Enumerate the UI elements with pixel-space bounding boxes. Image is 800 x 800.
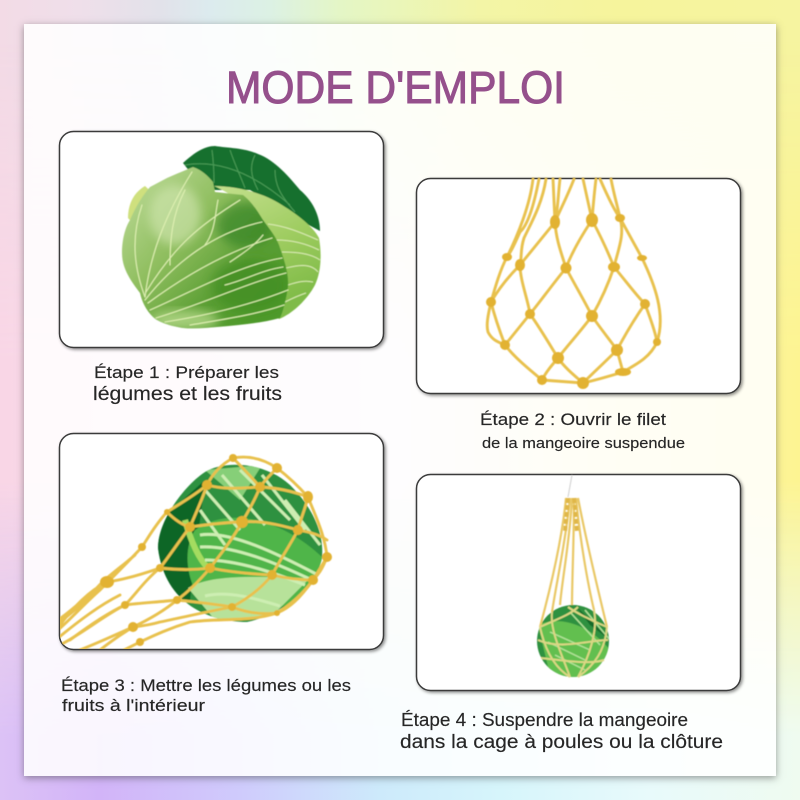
caption: step 2 (480, 410, 685, 452)
caption: step 2: de la mangeoire suspendue (482, 436, 685, 452)
caption: step 2: Étape 2 : Ouvrir le filet (480, 410, 666, 429)
icon: cabbage inside net (58, 454, 332, 652)
panel: step 3 image card (58, 434, 384, 652)
caption: step 1: légumes et les fruits (93, 384, 282, 405)
icon: hanging net with cabbage (537, 475, 610, 680)
icon: cabbage (122, 146, 321, 330)
title: MODE D'EMPLOI (226, 62, 565, 113)
caption: step 4 (400, 710, 723, 753)
icon: empty yellow net (486, 179, 661, 389)
panel: step 1 image card (60, 132, 384, 348)
caption: step 3: Étape 3 : Mettre les légumes ou les (61, 676, 351, 695)
caption: step 3 (61, 676, 351, 715)
caption: step 1 (93, 363, 282, 405)
caption: step 4: dans la cage à poules ou la clôture (400, 732, 723, 753)
caption: step 4: Étape 4 : Suspendre la mangeoire (401, 710, 688, 730)
panel: step 4 image card (416, 474, 740, 690)
caption: step 3: fruits à l'intérieur (62, 696, 205, 715)
caption: step 1: Étape 1 : Préparer les (94, 363, 279, 382)
panel: step 2 image card (416, 178, 740, 394)
